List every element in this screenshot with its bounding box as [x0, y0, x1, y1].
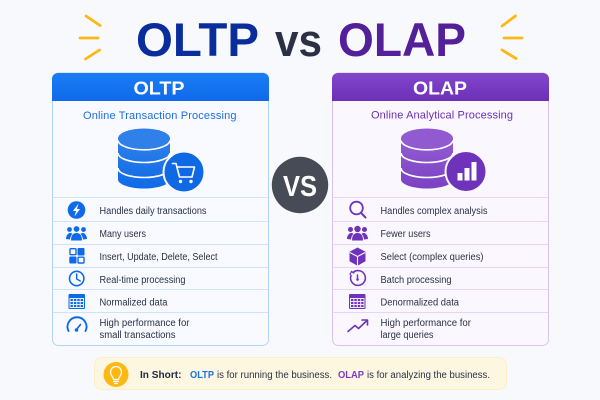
row: high performance large: large queries: [380, 330, 434, 341]
icon: database with bar chart: [401, 128, 486, 192]
icon: database with cart: [118, 128, 204, 192]
icon: lightning bolt: [68, 201, 85, 219]
row: denormalized: Denormalized data: [380, 298, 460, 308]
decorative sparks right: [502, 16, 522, 58]
VS badge: VS: [283, 171, 317, 203]
row: high performance small: High performance for: [100, 318, 190, 329]
icon: cube: [350, 248, 366, 266]
icon: batch timer: [350, 271, 365, 285]
decorative sparks left: [80, 16, 100, 59]
icon: light bulb: [104, 362, 128, 387]
row: select complex: Select (complex queries): [380, 252, 484, 263]
callout text: OLTP: [190, 370, 214, 381]
panel: OLTP: [52, 73, 269, 346]
title: OLAP: [338, 13, 466, 66]
OLTP row dividers: [53, 198, 268, 312]
callout: in short: [94, 358, 506, 390]
row: batch: Batch processing: [380, 275, 452, 286]
icon: clock: [70, 271, 84, 286]
OLTP header: OLTP: [134, 78, 184, 98]
icon: trend line: [348, 320, 368, 332]
title: OLTP: [136, 13, 259, 66]
row: high performance small: [100, 318, 190, 341]
OLAP header: [332, 73, 549, 101]
row: normalized: Normalized data: [100, 298, 168, 308]
row: real-time: Real-time processing: [100, 275, 186, 286]
callout text: OLAP: [338, 370, 364, 381]
icon: table: [349, 294, 366, 309]
row: high performance small: small transactions: [100, 330, 176, 341]
OLAP subtitle: Online Analytical Processing: [371, 110, 513, 122]
callout text: [140, 370, 490, 381]
row: daily transactions: Handles daily transactions: [100, 206, 207, 217]
callout text: is for running the business.: [217, 370, 332, 381]
row: many users: Many users: [100, 229, 146, 240]
callout text: is for analyzing the business.: [367, 370, 490, 381]
row: high performance large: High performance for: [380, 318, 472, 329]
icon: CRUD grid: [69, 248, 84, 264]
OLAP header: OLAP: [413, 78, 467, 98]
panel: OLAP: [332, 73, 549, 346]
OLTP subtitle: Online Transaction Processing: [83, 110, 236, 122]
icon: table: [68, 294, 85, 309]
OLTP header: [52, 73, 269, 101]
icon: magnifier: [350, 202, 366, 218]
icon: fewer users: [347, 226, 368, 240]
title: [136, 13, 466, 66]
icon: many users: [66, 226, 87, 240]
VS badge: [272, 157, 328, 213]
row: fewer users: Fewer users: [380, 229, 431, 240]
callout text: In Short:: [140, 370, 182, 381]
row: high performance large: [380, 318, 472, 341]
OLAP row dividers: [333, 198, 548, 312]
icon: gauge: [68, 317, 86, 331]
row: insert update delete select: Insert, Update, Delete, Select: [100, 252, 218, 263]
row: complex analysis: Handles complex analysis: [380, 206, 488, 217]
title: vs: [275, 15, 322, 66]
